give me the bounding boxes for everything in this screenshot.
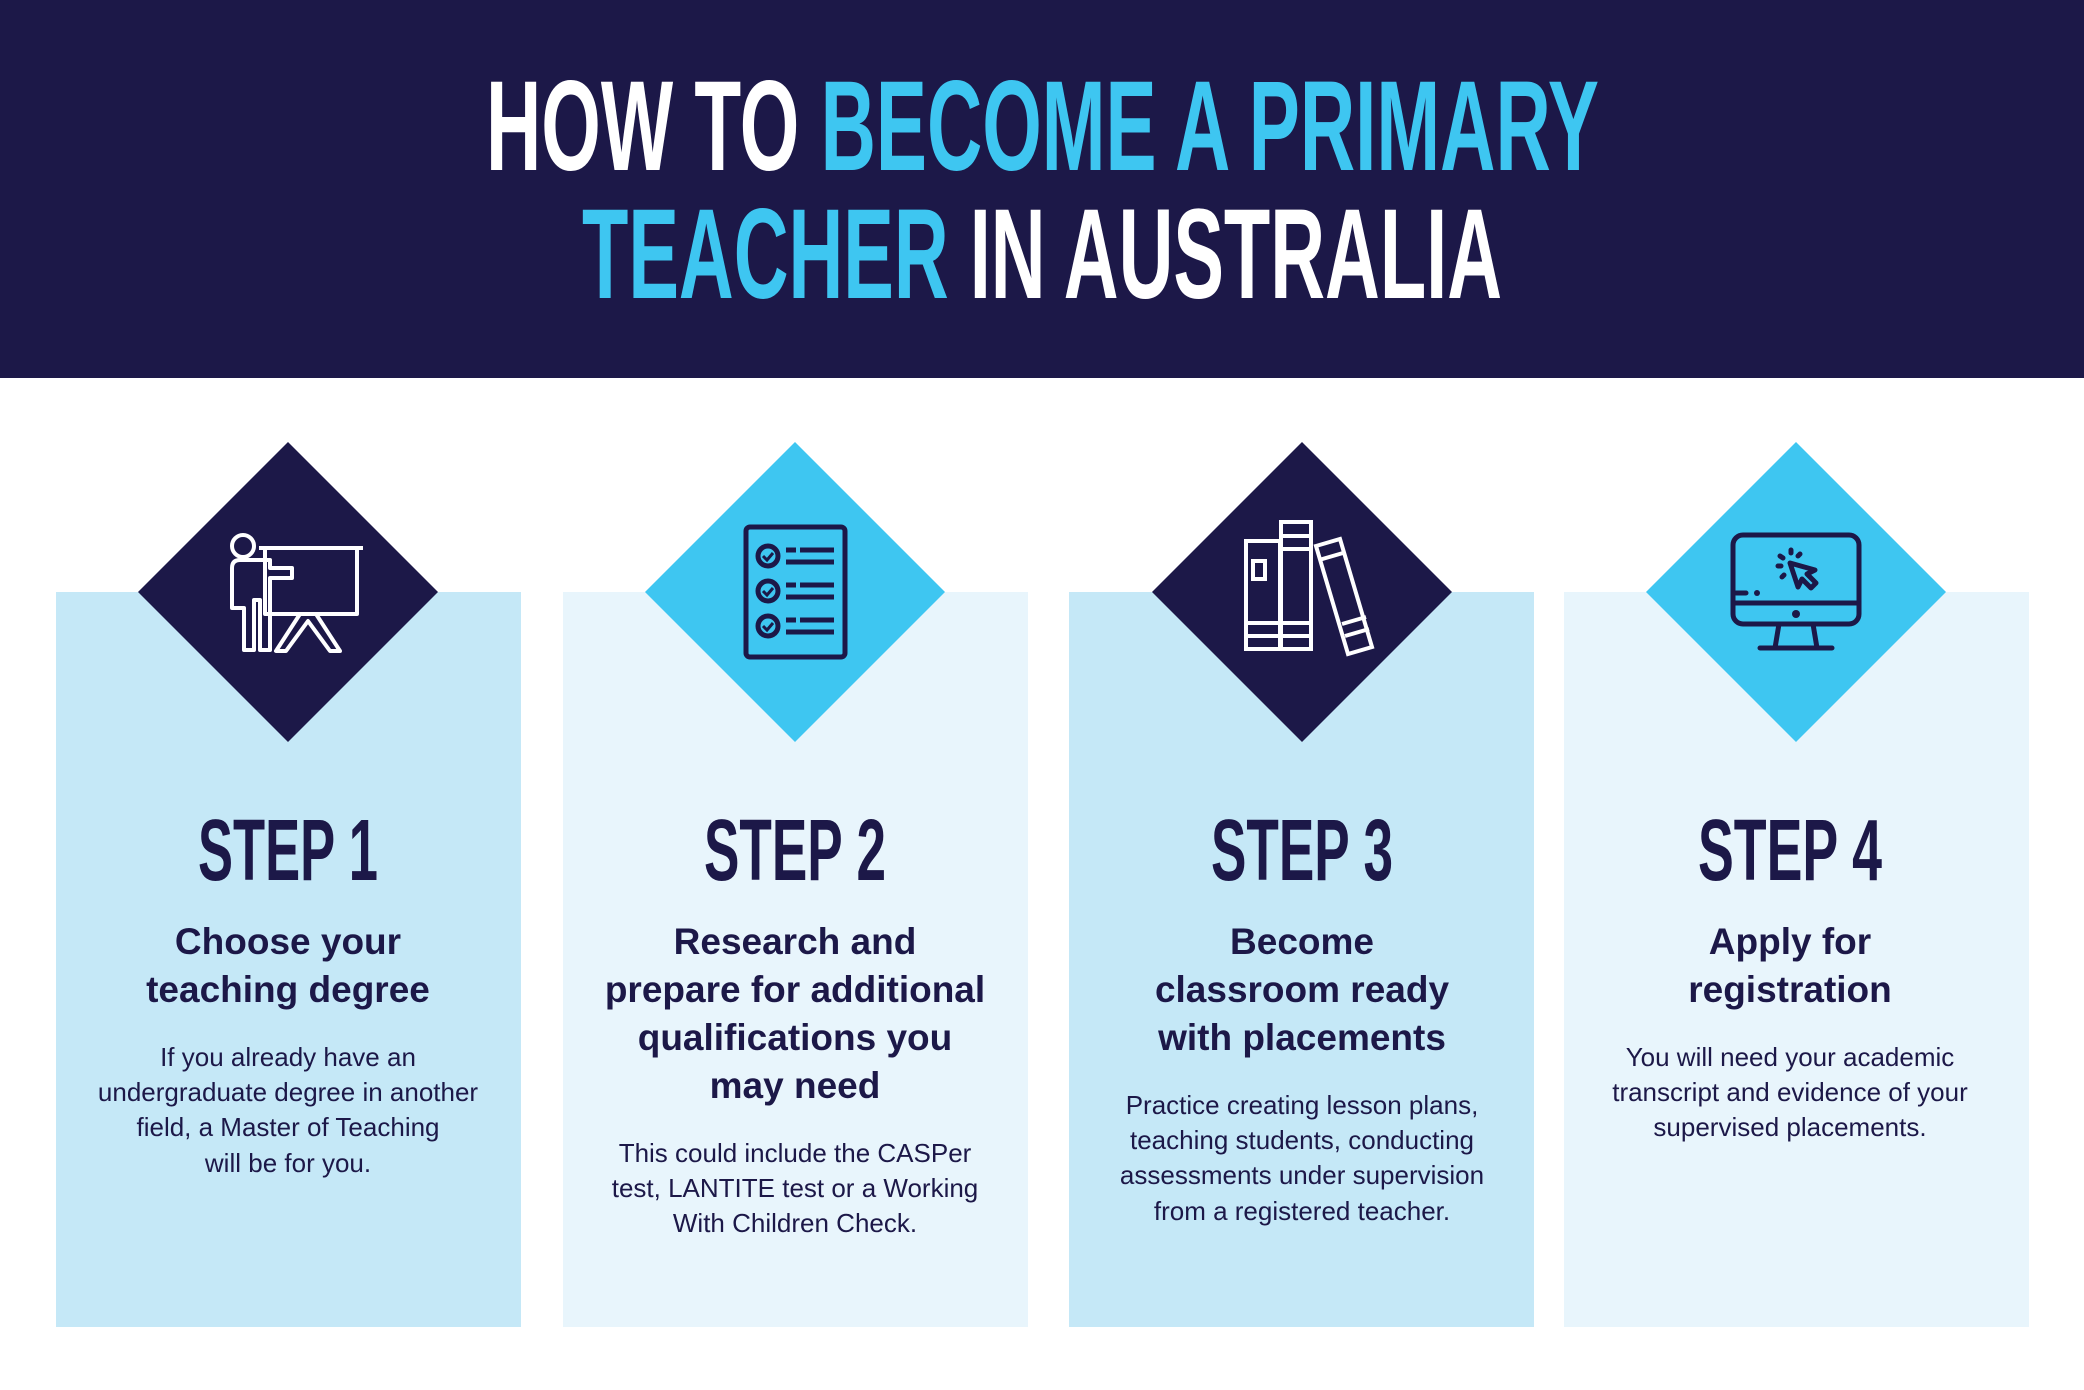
icon: computer [1646,442,1946,742]
step label 3: STEP 3 [1211,802,1393,899]
body 1: If you already have an [160,1042,416,1072]
heading 3 [1155,921,1449,1058]
body 1 [98,1042,478,1178]
body 2: With Children Check. [673,1208,917,1238]
body 1: will be for you. [204,1148,371,1178]
heading 1 [146,921,430,1010]
panel: step 2 [563,442,1028,1327]
body 2 [612,1138,978,1238]
heading 2: may need [710,1065,880,1106]
body 4: You will need your academic [1626,1042,1954,1072]
title: HOW TO BECOME A PRIMARY [486,55,1599,198]
body 2: test, LANTITE test or a Working [612,1173,978,1203]
heading 3: with placements [1157,1017,1446,1058]
heading 4: Apply for [1709,921,1871,962]
body 2: This could include the CASPer [619,1138,972,1168]
body 4: supervised placements. [1653,1112,1927,1142]
heading 2: Research and [674,921,916,962]
step label 1: STEP 1 [198,802,378,899]
body 4 [1612,1042,1968,1142]
heading 3: classroom ready [1155,969,1449,1010]
body 3: from a registered teacher. [1154,1196,1450,1226]
body 3: teaching students, conducting [1130,1125,1474,1155]
heading 2: prepare for additional [605,969,985,1010]
panel: step 1 [56,442,521,1327]
body 1: undergraduate degree in another [98,1077,478,1107]
heading 4: registration [1688,969,1892,1010]
body 4: transcript and evidence of your [1612,1077,1968,1107]
heading 1: teaching degree [146,969,430,1010]
panel: step 4 [1564,442,2029,1327]
body 3 [1120,1090,1484,1226]
step label 2: STEP 2 [704,802,886,899]
heading 2: qualifications you [638,1017,952,1058]
title [486,55,1599,326]
title: TEACHER IN AUSTRALIA [582,183,1502,326]
body 3: assessments under supervision [1120,1160,1484,1190]
body 1: field, a Master of Teaching [136,1112,440,1142]
step label 4: STEP 4 [1698,802,1882,899]
heading 1: Choose your [175,921,401,962]
icon: books [1152,442,1452,742]
header banner [0,0,2084,378]
heading 3: Become [1230,921,1374,962]
icon: checklist [645,442,945,742]
heading 4 [1688,921,1892,1010]
body 3: Practice creating lesson plans, [1126,1090,1478,1120]
heading 2 [605,921,985,1106]
panel: step 3 [1069,442,1534,1327]
icon: teacher at board [138,442,438,742]
